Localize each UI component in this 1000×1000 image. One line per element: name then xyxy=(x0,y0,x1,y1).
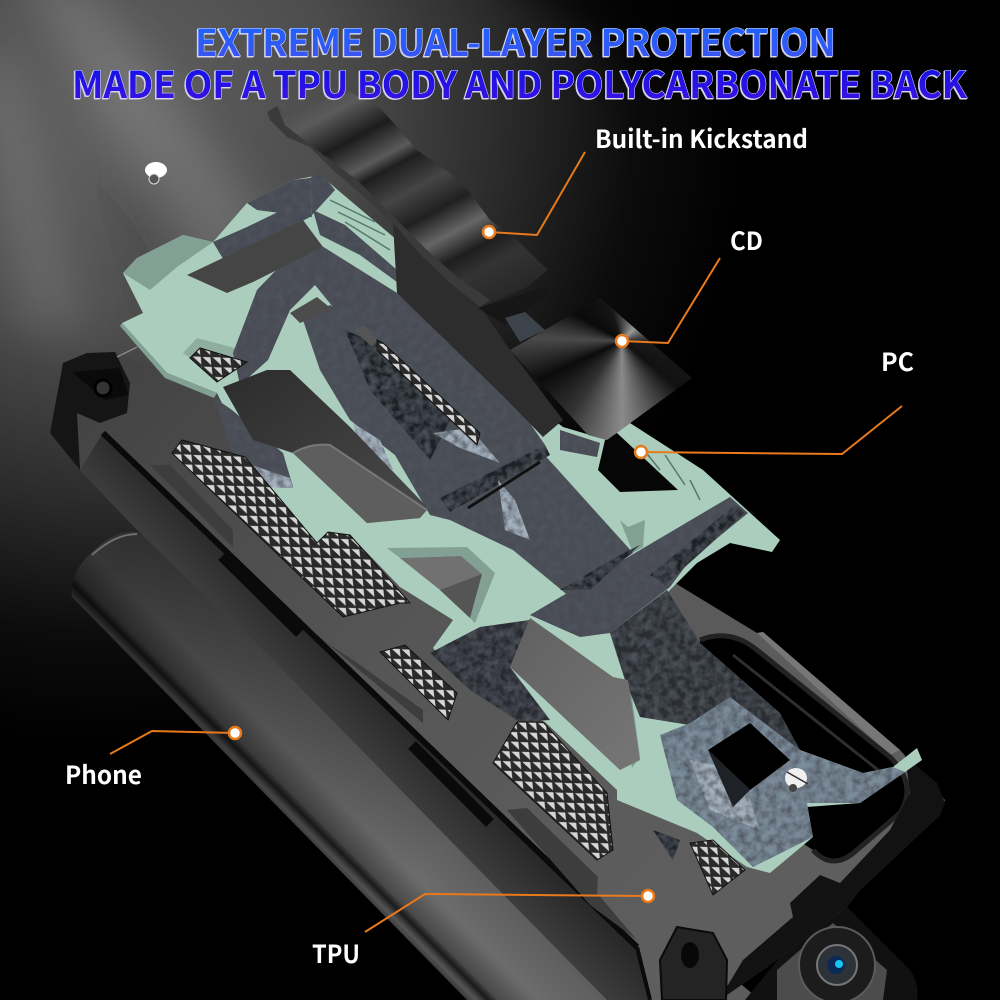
window large left xyxy=(223,370,427,523)
window lower right xyxy=(510,618,640,770)
window lower square xyxy=(400,556,482,618)
dark lower band xyxy=(80,433,650,1000)
title line 1: EXTREME DUAL-LAYER PROTECTION xyxy=(195,13,836,67)
camo band line xyxy=(468,462,540,508)
top left corner bumper xyxy=(50,347,137,470)
branches xyxy=(213,243,748,722)
bottom bracket xyxy=(660,927,727,1000)
callout: PC: PC xyxy=(881,343,914,379)
case bevel panels xyxy=(150,465,637,940)
camera square hole xyxy=(708,723,790,807)
CD metal plate xyxy=(510,302,692,440)
callout: TPU: TPU xyxy=(312,935,360,971)
camera lens xyxy=(799,927,875,1000)
title xyxy=(72,13,968,109)
phone body xyxy=(72,532,760,1000)
kickstand bracket xyxy=(478,287,548,342)
window upper centre xyxy=(290,297,333,323)
phone camera bump xyxy=(745,907,918,1000)
PC mint base shell xyxy=(122,175,922,873)
pale leaf patches xyxy=(243,423,760,830)
title line 2: MADE OF A TPU BODY AND POLYCARBONATE BACK xyxy=(72,55,968,109)
black rail along case side xyxy=(103,433,650,1000)
callout: CD xyxy=(616,222,763,347)
dark panel under kickstand xyxy=(393,223,563,437)
TPU case body xyxy=(50,352,945,1000)
right corner bumper xyxy=(710,755,945,1000)
PC camouflage layer xyxy=(120,172,922,873)
screw on PC xyxy=(785,768,808,792)
grip patches xyxy=(172,340,745,895)
callout: Phone xyxy=(65,727,241,792)
callout: Built-in Kickstand: Built-in Kickstand xyxy=(595,120,808,156)
callout: TPU xyxy=(312,890,654,971)
kickstand xyxy=(267,92,548,307)
palm strokes on mint xyxy=(330,200,700,500)
TPU windows through PC xyxy=(187,220,678,770)
case bevel highlight xyxy=(757,632,900,755)
callout: PC xyxy=(635,343,914,458)
window top left xyxy=(187,220,323,293)
lower leaf xyxy=(660,697,905,867)
kickstand lip xyxy=(267,106,490,307)
camera cutout xyxy=(690,636,907,861)
top arm xyxy=(213,172,397,282)
callout: Built-in Kickstand xyxy=(483,120,808,238)
window small xyxy=(354,325,378,347)
main trunk xyxy=(303,305,633,597)
callout: Phone: Phone xyxy=(65,756,142,792)
PC darker bevel facets xyxy=(120,235,645,768)
lower trunk xyxy=(610,590,800,750)
camouflage bark and leaves xyxy=(213,172,905,867)
callout: CD: CD xyxy=(730,222,763,258)
black triangle gap xyxy=(598,433,678,492)
screw top left xyxy=(145,162,167,184)
dark bark streaks xyxy=(345,330,745,860)
